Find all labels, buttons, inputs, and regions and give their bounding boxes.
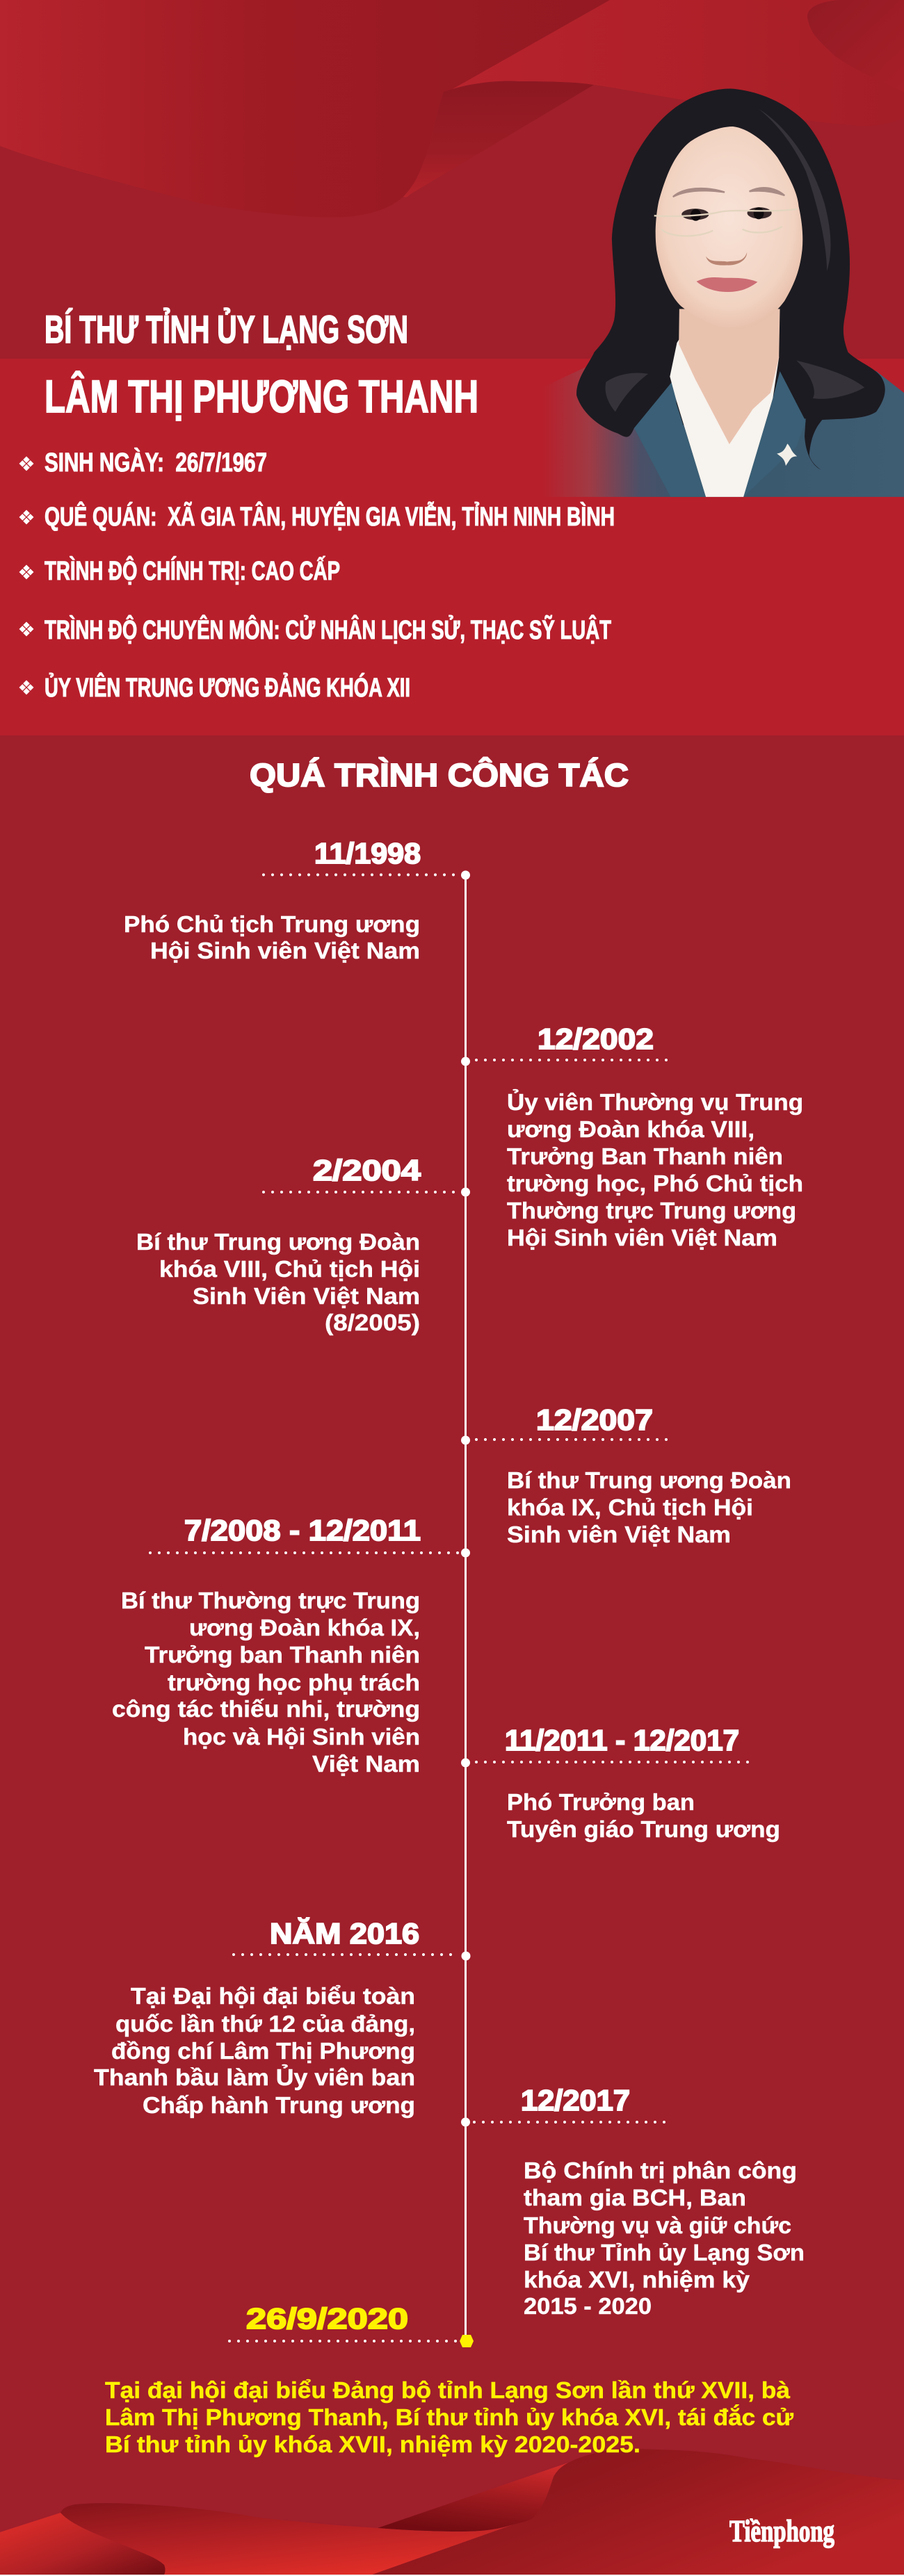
timeline item: 12/2002: Thường trực Trung ương: [507, 1198, 796, 1223]
heading: office title: BÍ THƯ TỈNH ỦY LẠNG SƠN: [45, 307, 408, 351]
detail: birth date: [19, 447, 267, 478]
panel: career background: [0, 735, 904, 2576]
timeline item: 12/2007: khóa IX, Chủ tịch Hội: [507, 1494, 753, 1520]
timeline item: 7/2008 - 12/2011: công tác thiếu nhi, trường: [112, 1696, 420, 1722]
portrait lapels: [634, 371, 806, 497]
timeline item: 12/2002: [461, 1022, 803, 1250]
timeline item: 11/1998: 11/1998: [314, 837, 421, 870]
portrait hair highlight: [606, 109, 864, 411]
timeline item: 2016: Thanh bầu làm Ủy viên ban: [94, 2064, 415, 2090]
portrait face: [656, 127, 802, 329]
timeline item: 12/2017: 12/2017: [521, 2084, 630, 2117]
detail: political level: [19, 555, 340, 586]
timeline item: 7/2008 - 12/2011: học và Hội Sinh viên: [183, 1724, 420, 1750]
personal details list: [19, 447, 615, 703]
timeline item: 12/2017: Thường vụ và giữ chức: [524, 2212, 791, 2238]
portrait mouth: [697, 277, 757, 292]
timeline item: 12/2007: Sinh viên Việt Nam: [507, 1522, 731, 1547]
portrait nose: [706, 252, 747, 266]
timeline item: 12/2017: Bộ Chính trị phân công: [524, 2158, 797, 2183]
timeline item: 12/2017: tham gia BCH, Ban: [524, 2185, 746, 2210]
detail: professional level: TRÌNH ĐỘ CHUYÊN MÔN: CỬ NHÂN LỊCH SỬ, THẠC SỸ LUẬT: [45, 614, 611, 645]
timeline item: 2016: Tại Đại hội đại biểu toàn: [131, 1983, 415, 2009]
timeline item: 2/2004: Sinh Viên Việt Nam: [193, 1283, 420, 1309]
timeline item: 11/1998: [124, 837, 470, 963]
timeline item: 2/2004: (8/2005): [325, 1310, 420, 1335]
timeline item: 2/2004: khóa VIII, Chủ tịch Hội: [159, 1256, 420, 1282]
top ribbon decoration: [0, 0, 904, 218]
portrait: [542, 89, 904, 497]
timeline item: 12/2017: 2015 - 2020: [524, 2293, 652, 2319]
timeline item: 11/1998: Phó Chủ tịch Trung ương: [124, 911, 420, 937]
timeline item: 7/2008 - 12/2011: Bí thư Thường trực Trung: [121, 1588, 420, 1613]
timeline item: 2/2004: 2/2004: [313, 1154, 421, 1187]
timeline item: 2016: đồng chí Lâm Thị Phương: [111, 2038, 415, 2064]
timeline item: 12/2017: khóa XVI, nhiệm kỳ: [524, 2267, 750, 2292]
logo: Tiền phong: Tiềnphong: [729, 2514, 834, 2548]
timeline item: 12/2002: 12/2002: [538, 1022, 654, 1055]
timeline item: 11/2011 - 12/2017: 11/2011 - 12/2017: [505, 1724, 739, 1756]
portrait glasses: [654, 209, 798, 236]
timeline item: 2016: NĂM 2016: [270, 1917, 419, 1950]
timeline item: 12/2002: Hội Sinh viên Việt Nam: [507, 1225, 777, 1250]
timeline item: 2016: quốc lần thứ 12 của đảng,: [115, 2011, 415, 2037]
timeline item: 12/2002: ương Đoàn khóa VIII,: [507, 1116, 754, 1142]
timeline item: 12/2002: Ủy viên Thường vụ Trung: [507, 1089, 803, 1115]
closing statement: [105, 2377, 793, 2457]
timeline item: 2/2004: [136, 1154, 470, 1335]
closing statement: Bí thư tỉnh ủy khóa XVII, nhiệm kỳ 2020-2025.: [105, 2431, 640, 2457]
timeline item: 7/2008 - 12/2011: Việt Nam: [312, 1751, 420, 1777]
timeline item: 12/2007: Bí thư Trung ương Đoàn: [507, 1467, 791, 1493]
timeline item: 12/2002: trường học, Phó Chủ tịch: [507, 1171, 803, 1196]
timeline item: 7/2008 - 12/2011: Trưởng ban Thanh niên: [145, 1642, 420, 1668]
timeline item: 11/2011 - 12/2017: Phó Trưởng ban: [507, 1789, 695, 1815]
portrait eyebrows: [673, 188, 784, 197]
timeline item: 2016: Chấp hành Trung ương: [143, 2092, 415, 2118]
detail: central committee: ỦY VIÊN TRUNG ƯƠNG ĐẢNG KHÓA XII: [45, 672, 410, 703]
timeline item: 7/2008 - 12/2011: 7/2008 - 12/2011: [184, 1514, 421, 1547]
timeline item: 7/2008 - 12/2011: ương Đoàn khóa IX,: [189, 1615, 420, 1640]
detail: political level: TRÌNH ĐỘ CHÍNH TRỊ: CAO CẤP: [45, 555, 340, 586]
timeline item: 11/2011 - 12/2017: Tuyên giáo Trung ương: [507, 1816, 780, 1842]
timeline item: 12/2002: Trưởng Ban Thanh niên: [507, 1143, 783, 1169]
timeline item: 11/2011 - 12/2017: [461, 1724, 780, 1842]
portrait pin: [777, 443, 797, 466]
portrait neck: [679, 309, 780, 444]
timeline item: 7/2008 - 12/2011: [112, 1514, 470, 1777]
heading: name: LÂM THỊ PHƯƠNG THANH: [45, 370, 478, 422]
timeline item: 7/2008 - 12/2011: trường học phụ trách: [168, 1670, 420, 1695]
heading: career: QUÁ TRÌNH CÔNG TÁC: [250, 757, 629, 793]
portrait eyes: [681, 207, 772, 221]
timeline item: 26/9/2020: [229, 2302, 474, 2347]
header background: [0, 0, 904, 735]
detail: central committee: [19, 672, 410, 703]
timeline item: 11/1998: Hội Sinh viên Việt Nam: [150, 938, 420, 963]
timeline item: 12/2017: [461, 2084, 805, 2319]
timeline item: 12/2007: [461, 1403, 791, 1547]
portrait suit: [542, 363, 904, 497]
timeline item: 2/2004: Bí thư Trung ương Đoàn: [136, 1229, 420, 1255]
detail: hometown: [19, 501, 615, 532]
timeline item: 2016: [94, 1917, 470, 2118]
portrait hair: [576, 89, 885, 470]
timeline item: 12/2017: Bí thư Tỉnh ủy Lạng Sơn: [524, 2240, 805, 2265]
portrait shirt: [670, 336, 779, 497]
detail: professional level: [19, 614, 611, 645]
detail: hometown: QUÊ QUÁN: XÃ GIA TÂN, HUYỆN GIA VIỄN, TỈNH NINH BÌNH: [45, 501, 615, 532]
closing statement: Lâm Thị Phương Thanh, Bí thư tỉnh ủy khóa XVI, tái đắc cử: [105, 2404, 793, 2430]
timeline item: 26/9/2020: 26/9/2020: [246, 2302, 408, 2335]
footer ribbon: [0, 2449, 904, 2576]
detail: birth date: SINH NGÀY: 26/7/1967: [45, 447, 267, 478]
timeline item: 12/2007: 12/2007: [536, 1403, 653, 1436]
timeline axis: [465, 874, 467, 2341]
closing statement: Tại đại hội đại biểu Đảng bộ tỉnh Lạng Sơn lần thứ XVII, bà: [105, 2377, 791, 2403]
